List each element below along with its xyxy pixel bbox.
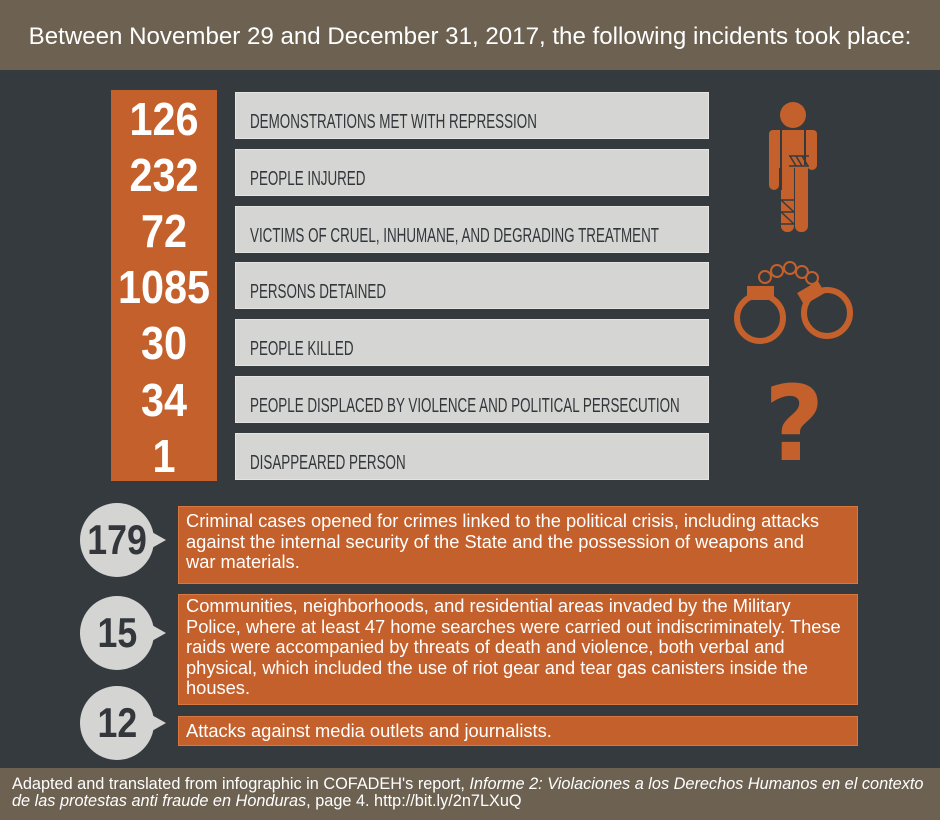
panel: incident labels bbox=[235, 92, 709, 480]
callout: 179: against the internal security of the State and the possession of weapons and bbox=[186, 530, 804, 552]
panel: numbers column: 126 bbox=[129, 93, 199, 145]
callout: 15 bbox=[80, 594, 858, 705]
panel: incident labels: DEMONSTRATIONS MET WITH REPRESSION bbox=[250, 111, 537, 133]
panel: incident labels: PEOPLE KILLED bbox=[250, 338, 354, 360]
panel: numbers column: 1085 bbox=[118, 261, 210, 313]
callout: 179: 179 bbox=[87, 516, 147, 563]
callout: 15: houses. bbox=[186, 677, 250, 698]
callout: 179 bbox=[80, 503, 858, 584]
callout: 15: Police, where at least 47 home searches were carried out indiscriminately. These bbox=[186, 616, 841, 636]
panel: numbers column: 232 bbox=[129, 149, 199, 201]
footer: source: Adapted and translated from infographic in COFADEH's report, Informe 2: Violaciones a los Derechos Humanos en el contexto bbox=[12, 775, 923, 793]
panel: incident labels: VICTIMS OF CRUEL, INHUMANE, AND DEGRADING TREATMENT bbox=[250, 225, 659, 247]
icon: handcuffs bbox=[734, 261, 853, 344]
callout: 15: raids were accompanied by threats of death and violence, both verbal and bbox=[186, 636, 785, 657]
panel: numbers column: 1 bbox=[152, 430, 176, 482]
panel: incident labels: PEOPLE DISPLACED BY VIOLENCE AND POLITICAL PERSECUTION bbox=[250, 395, 680, 417]
footer: source: de las protestas anti fraude en Honduras, page 4. http://bit.ly/2n7LXuQ bbox=[12, 792, 522, 810]
icon: injured person bbox=[769, 102, 817, 232]
icon: question mark: ? bbox=[764, 363, 824, 485]
callout: 179: Criminal cases opened for crimes linked to the political crisis, including attacks bbox=[186, 510, 819, 531]
panel: numbers column bbox=[111, 90, 217, 481]
callout: 15: Communities, neighborhoods, and residential areas invaded by the Military bbox=[186, 595, 791, 616]
callout: 15: physical, which included the use of riot gear and tear gas canisters inside the bbox=[186, 656, 808, 678]
panel: numbers column: 34 bbox=[141, 374, 187, 426]
panel: incident labels: PEOPLE INJURED bbox=[250, 168, 365, 190]
panel: numbers column: 72 bbox=[141, 205, 187, 257]
callout: 12: 12 bbox=[97, 699, 137, 746]
callout: 12: Attacks against media outlets and journalists. bbox=[186, 720, 552, 741]
panel: incident labels: DISAPPEARED PERSON bbox=[250, 452, 406, 474]
callout: 179: war materials. bbox=[186, 551, 300, 572]
title bbox=[0, 0, 940, 70]
panel: numbers column: 30 bbox=[141, 317, 187, 369]
panel: incident labels: PERSONS DETAINED bbox=[250, 281, 386, 303]
footer: source bbox=[0, 768, 940, 820]
callout: 15: 15 bbox=[97, 609, 137, 656]
callout: 12 bbox=[80, 686, 858, 760]
title: Between November 29 and December 31, 2017, the following incidents took place: bbox=[29, 23, 911, 50]
